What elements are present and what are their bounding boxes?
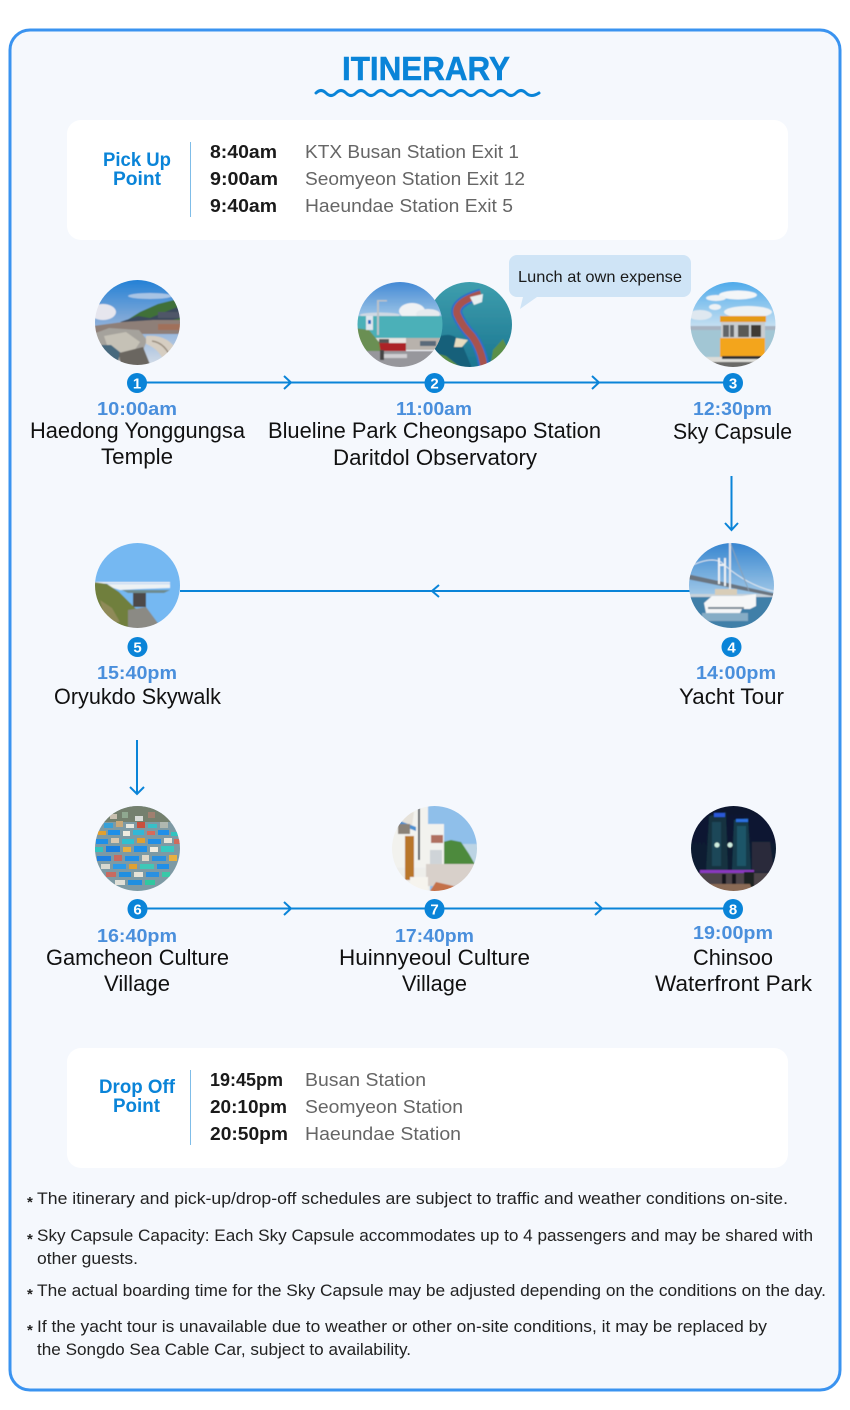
panel: pick up point: Point <box>113 169 162 190</box>
stop 1: Haedong Yonggungsa Temple: 10:00am <box>97 398 177 419</box>
stop 8: Chinsoo Waterfront Park: 19:00pm <box>693 922 773 943</box>
text block: notes: the Songdo Sea Cable Car, subject to availability. <box>37 1340 411 1359</box>
stop 3: Sky Capsule <box>673 280 792 444</box>
title <box>316 50 539 96</box>
text block: notes: The itinerary and pick-up/drop-off schedules are subject to traffic and weather conditions on-site. <box>37 1189 788 1208</box>
stop 5: Oryukdo Skywalk: 5 <box>133 640 142 656</box>
panel: drop off point: Seomyeon Station <box>305 1097 463 1117</box>
panel: drop off point: Drop Off <box>99 1077 176 1098</box>
panel: drop off point: Point <box>113 1096 161 1117</box>
panel: drop off point: 20:50pm <box>210 1124 288 1144</box>
panel: drop off point: Busan Station <box>305 1070 426 1090</box>
panel: pick up point: 8:40am <box>210 142 277 162</box>
panel: drop off point: 20:10pm <box>210 1097 287 1117</box>
text block: notes: Sky Capsule Capacity: Each Sky Capsule accommodates up to 4 passengers and may be shared with <box>37 1226 813 1245</box>
stop 5: Oryukdo Skywalk <box>54 541 222 709</box>
stop 2: Blueline Park and Daritdol Observatory: Blueline Park Cheongsapo Station <box>268 418 601 443</box>
stop 8: Chinsoo Waterfront Park <box>655 804 813 996</box>
panel: drop off point: Haeundae Station <box>305 1124 461 1144</box>
text block: notes: * <box>27 1286 33 1303</box>
text block: notes: * <box>27 1322 33 1339</box>
stop 8: Chinsoo Waterfront Park: 8 <box>729 902 737 918</box>
stop 3: Sky Capsule: Sky Capsule <box>673 419 792 444</box>
stop 6: Gamcheon Culture Village: 16:40pm <box>97 925 177 946</box>
callout: lunch <box>509 255 691 309</box>
stop 4: Yacht Tour: 14:00pm <box>696 662 776 683</box>
arrow: stop 4 to stop 5 <box>180 585 690 597</box>
stop 7: Huinnyeoul Culture Village: Village <box>402 971 467 996</box>
stop 6: Gamcheon Culture Village: Village <box>104 971 170 996</box>
arrow: route row 1 <box>137 376 733 389</box>
title: ITINERARY <box>342 50 510 87</box>
stop 2: Blueline Park and Daritdol Observatory: Daritdol Observatory <box>333 445 537 470</box>
panel: pick up point: Seomyeon Station Exit 12 <box>305 169 525 189</box>
stop 2: Blueline Park and Daritdol Observatory: 11:00am <box>396 398 472 419</box>
stop 7: Huinnyeoul Culture Village: 7 <box>430 902 439 918</box>
stop 1: Haedong Yonggungsa Temple: Temple <box>101 444 173 469</box>
stop 5: Oryukdo Skywalk: Oryukdo Skywalk <box>54 684 222 709</box>
text block: notes: * <box>27 1194 33 1211</box>
panel: pick up point: KTX Busan Station Exit 1 <box>305 142 519 162</box>
stop 2: Blueline Park and Daritdol Observatory <box>268 280 601 470</box>
stop 6: Gamcheon Culture Village: 6 <box>133 902 142 918</box>
panel: drop off point: 19:45pm <box>210 1070 283 1090</box>
stop 5: Oryukdo Skywalk: 15:40pm <box>97 662 177 683</box>
text block: notes: If the yacht tour is unavailable due to weather or other on-site conditions, it may be replaced by <box>37 1317 768 1336</box>
text block: notes: * <box>27 1231 33 1248</box>
arrow: stop 5 to stop 6 <box>130 740 144 794</box>
stop 1: Haedong Yonggungsa Temple: 1 <box>133 376 141 392</box>
stop 4: Yacht Tour: Yacht Tour <box>679 684 784 709</box>
panel: pick up point: Pick Up <box>103 150 171 171</box>
panel: pick up point <box>67 120 788 240</box>
stop 3: Sky Capsule: 12:30pm <box>693 398 772 419</box>
stop 3: Sky Capsule: 3 <box>729 376 737 392</box>
stop 8: Chinsoo Waterfront Park: Chinsoo <box>693 945 773 970</box>
arrow: stop 3 to stop 4 <box>725 476 738 530</box>
panel: pick up point: 9:00am <box>210 169 278 189</box>
text block: notes: The actual boarding time for the Sky Capsule may be adjusted depending on the conditions on the day. <box>37 1281 826 1300</box>
stop 7: Huinnyeoul Culture Village <box>339 804 530 996</box>
stop 6: Gamcheon Culture Village: Gamcheon Culture <box>46 945 229 970</box>
panel: drop off point <box>67 1048 788 1168</box>
callout: lunch: Lunch at own expense <box>518 269 682 286</box>
stop 4: Yacht Tour <box>679 541 784 709</box>
stop 1: Haedong Yonggungsa Temple <box>30 278 246 469</box>
stop 7: Huinnyeoul Culture Village: 17:40pm <box>395 925 474 946</box>
text block: notes: other guests. <box>37 1249 138 1268</box>
stop 2: Blueline Park and Daritdol Observatory: 2 <box>430 376 439 392</box>
text block: notes <box>27 1189 826 1359</box>
stop 7: Huinnyeoul Culture Village: Huinnyeoul Culture <box>339 945 530 970</box>
stop 4: Yacht Tour: 4 <box>727 640 736 656</box>
stop 6: Gamcheon Culture Village <box>46 806 229 996</box>
arrow: route row 3 <box>137 902 733 915</box>
panel: pick up point: 9:40am <box>210 196 277 216</box>
panel: pick up point: Haeundae Station Exit 5 <box>305 196 513 216</box>
stop 1: Haedong Yonggungsa Temple: Haedong Yonggungsa <box>30 418 246 443</box>
stop 8: Chinsoo Waterfront Park: Waterfront Park <box>655 971 813 996</box>
